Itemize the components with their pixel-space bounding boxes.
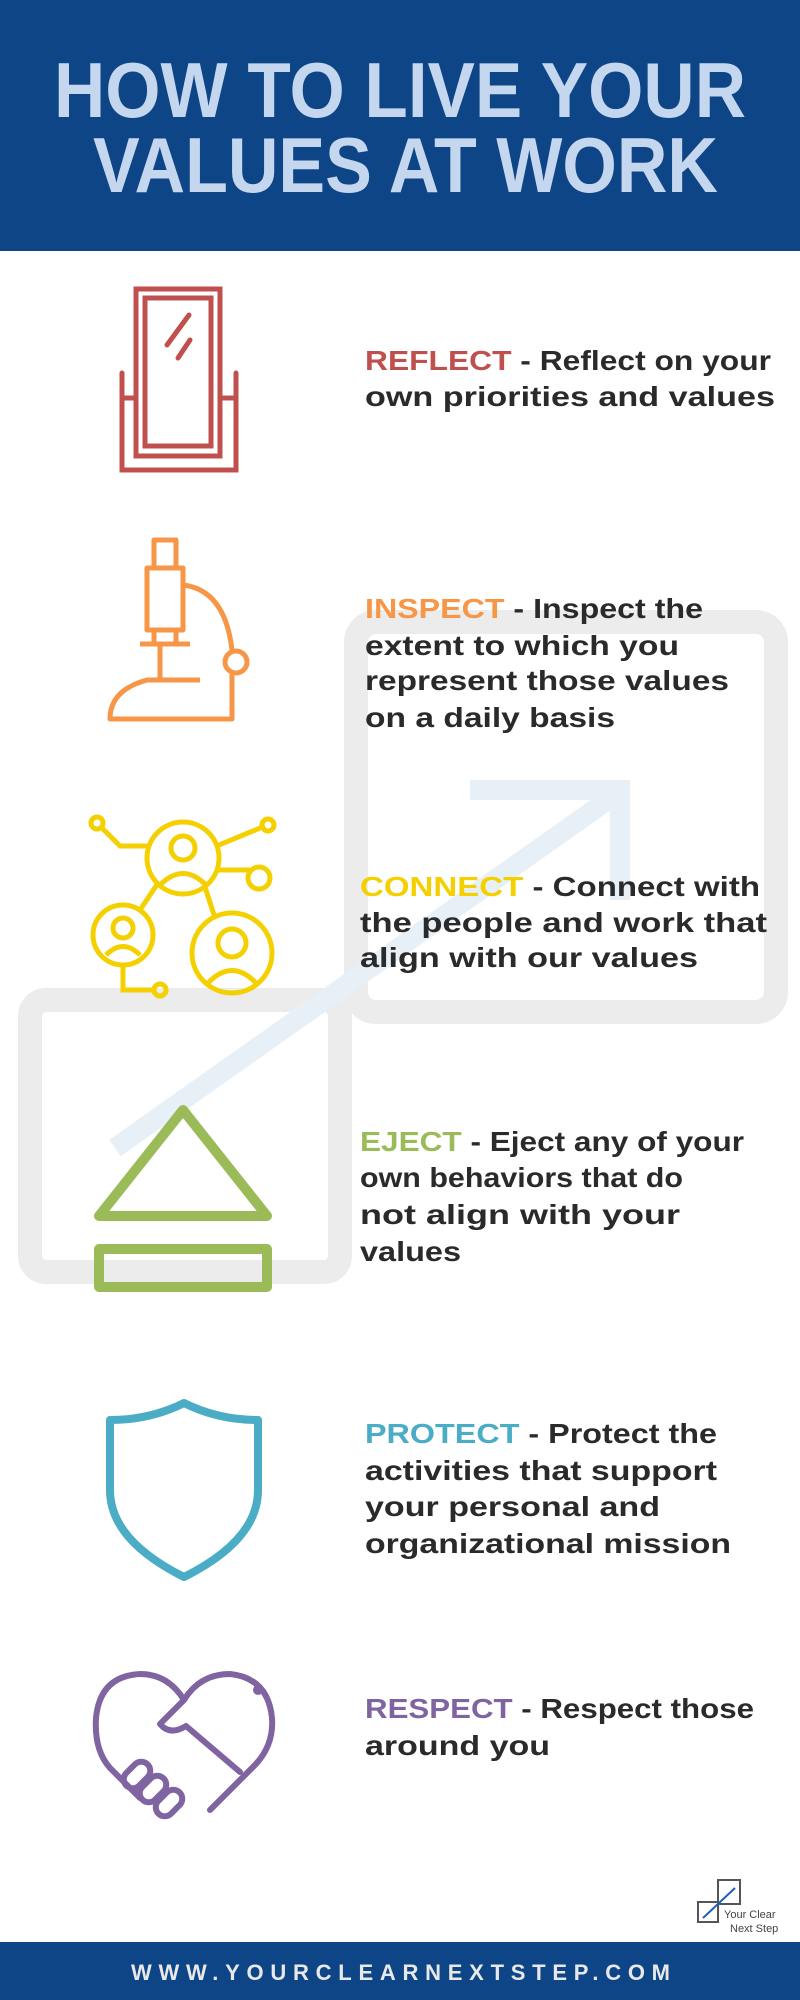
icon: connect people: [91, 817, 274, 996]
text: eject: own behaviors that do: [360, 1162, 683, 1193]
icon: eject: [99, 1110, 267, 1287]
header: [0, 0, 800, 251]
text: inspect: extent to which you: [365, 630, 679, 661]
text: protect: [365, 1418, 731, 1559]
text: eject: [360, 1126, 744, 1267]
text: protect: activities that support: [365, 1455, 717, 1486]
title: HOW TO LIVE YOUR: [54, 46, 746, 134]
text: respect: around you: [365, 1730, 550, 1761]
background watermark: [30, 622, 776, 1272]
text: reflect: REFLECT - Reflect on your: [365, 345, 771, 376]
text: inspect: represent those values: [365, 665, 729, 696]
text: reflect: own priorities and values: [365, 381, 775, 412]
text: eject: EJECT - Eject any of your: [360, 1126, 744, 1157]
text: connect: align with our values: [360, 942, 698, 973]
text: protect: your personal and: [365, 1491, 660, 1522]
icon: mirror: [122, 289, 236, 470]
logo: [698, 1880, 778, 1935]
footer url: WWW.YOURCLEARNEXTSTEP.COM: [131, 1960, 670, 1985]
text: inspect: [365, 593, 729, 733]
text: eject: not align with your: [360, 1199, 680, 1230]
logo: Next Step: [730, 1923, 778, 1935]
text: reflect: [365, 345, 775, 412]
text: connect: the people and work that: [360, 907, 767, 938]
title: VALUES AT WORK: [93, 121, 718, 209]
footer: [0, 1942, 800, 2000]
title: [54, 46, 746, 209]
icon: handshake heart: [96, 1674, 272, 1820]
text: respect: RESPECT - Respect those: [365, 1693, 754, 1724]
icon: microscope: [110, 540, 247, 719]
text: connect: CONNECT - Connect with: [360, 871, 760, 902]
logo: Your Clear: [724, 1909, 776, 1921]
text: protect: PROTECT - Protect the: [365, 1418, 717, 1449]
text: connect: [360, 871, 767, 973]
text: protect: organizational mission: [365, 1528, 731, 1559]
text: eject: values: [360, 1236, 461, 1267]
text: inspect: on a daily basis: [365, 702, 615, 733]
icon: shield: [110, 1403, 258, 1577]
text: respect: [365, 1693, 754, 1761]
text: inspect: INSPECT - Inspect the: [365, 593, 703, 624]
